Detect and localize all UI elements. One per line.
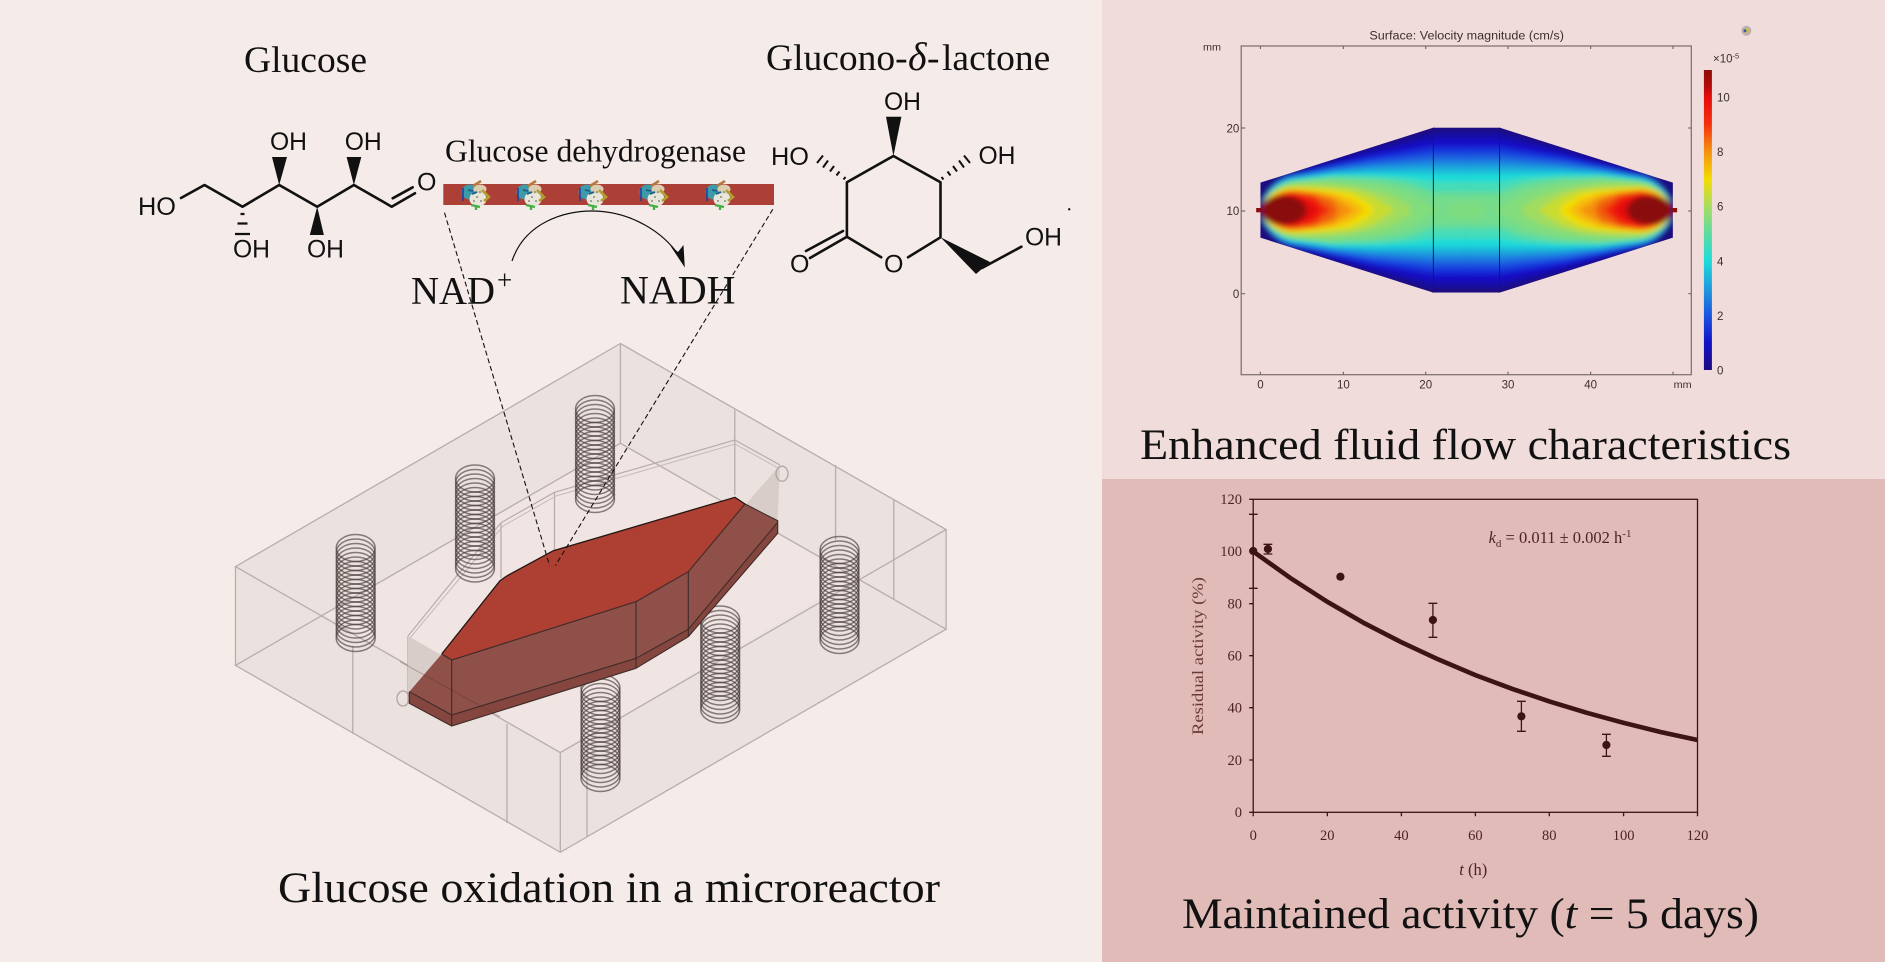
x axis tick labels: 120 bbox=[1687, 828, 1708, 844]
velocity field bbox=[1256, 128, 1678, 293]
fitted decay curve bbox=[1253, 551, 1698, 740]
heading: Glucono-delta-lactone: lactone bbox=[942, 38, 1050, 79]
annotation: deactivation constant: = 0.011 ± 0.002 h bbox=[1501, 528, 1623, 547]
axis labels: 10 bbox=[1227, 206, 1239, 218]
molecule: glucono-delta-lactone: O bbox=[884, 250, 903, 278]
x axis tick labels: 0 bbox=[1250, 828, 1257, 844]
chart: velocity magnitude surface plot bbox=[1203, 26, 1751, 391]
arrow: NAD+ to NADH bbox=[512, 211, 685, 268]
label: NAD+: NAD bbox=[411, 270, 495, 312]
flow channel outline bbox=[397, 440, 788, 706]
molecule: glucose: O bbox=[417, 169, 436, 197]
molecule: glucono-delta-lactone: OH bbox=[978, 142, 1016, 170]
annotation: deactivation constant: -1 bbox=[1622, 528, 1631, 540]
data points with error bars bbox=[1249, 514, 1611, 756]
caption: Maintained activity (t = 5 days): Maintained activity ( t = 5 days) bbox=[1182, 891, 1759, 938]
coil: left bbox=[336, 534, 375, 652]
heading: Glucono-delta-lactone: δ bbox=[908, 34, 928, 79]
heading: Glucono-delta-lactone: - bbox=[927, 38, 940, 79]
caption: Enhanced fluid flow characteristics: Enhanced fluid flow characteristics bbox=[1140, 422, 1791, 469]
molecule: glucose bbox=[138, 128, 436, 264]
x axis tick labels: 60 bbox=[1468, 828, 1483, 844]
molecule: glucose: HO bbox=[138, 193, 176, 221]
x axis tick labels: 40 bbox=[1394, 828, 1409, 844]
molecule: glucose: OH bbox=[307, 236, 344, 264]
axis labels: mm bbox=[1203, 43, 1221, 54]
panel: glucose oxidation in a microreactor bbox=[0, 0, 1102, 962]
x axis tick labels: 100 bbox=[1613, 828, 1634, 844]
label: Glucose dehydrogenase: Glucose dehydrogenase bbox=[445, 134, 746, 169]
colour bar legend: ×10 bbox=[1713, 53, 1733, 65]
reactor chamber bbox=[400, 497, 778, 726]
zoom guides: dashed lines bbox=[444, 209, 773, 566]
coil: front bbox=[581, 674, 620, 792]
molecule: glucono-delta-lactone: OH bbox=[1025, 224, 1062, 252]
colour bar legend: 2 bbox=[1717, 311, 1723, 323]
molecule: glucono-delta-lactone: O bbox=[790, 250, 809, 278]
molecule: glucono-delta-lactone: HO bbox=[771, 143, 809, 171]
axis labels: 0 bbox=[1233, 289, 1239, 301]
y axis tick labels: 120 bbox=[1220, 492, 1242, 508]
chart: residual activity vs time bbox=[1190, 492, 1708, 879]
coil: right bbox=[820, 536, 859, 654]
molecule: glucose: OH bbox=[345, 128, 382, 156]
colour bar legend: -5 bbox=[1733, 51, 1739, 60]
molecule: glucono-delta-lactone bbox=[771, 88, 1062, 278]
label: NAD+: + bbox=[497, 265, 512, 295]
annotation: deactivation constant: d bbox=[1496, 538, 1502, 550]
coil: back left bbox=[456, 465, 494, 582]
plot title: Surface: Velocity magnitude (cm/s) bbox=[1369, 30, 1564, 42]
small icon bbox=[1741, 26, 1751, 36]
molecule: glucose: OH bbox=[233, 236, 270, 264]
colour bar legend: 8 bbox=[1717, 147, 1723, 159]
colour bar legend: 0 bbox=[1717, 365, 1723, 377]
axis labels bbox=[1203, 43, 1692, 391]
colour bar legend bbox=[1704, 51, 1739, 377]
axis labels: 20 bbox=[1227, 123, 1239, 135]
transparent housing block bbox=[236, 344, 946, 852]
plot frame and ticks bbox=[1241, 46, 1691, 375]
y axis tick labels: 0 bbox=[1235, 805, 1242, 821]
axis labels: 30 bbox=[1502, 379, 1514, 391]
colour bar legend: 10 bbox=[1717, 92, 1730, 104]
y axis title: Residual activity (%) bbox=[1190, 577, 1207, 735]
molecule: glucono-delta-lactone: OH bbox=[884, 88, 921, 116]
heading: Glucono-delta-lactone: Glucono- bbox=[766, 38, 908, 79]
axis labels: 20 bbox=[1419, 379, 1432, 391]
axis labels: 0 bbox=[1257, 379, 1264, 391]
x axis tick labels: 20 bbox=[1320, 828, 1335, 844]
axis labels: 40 bbox=[1584, 379, 1597, 391]
panel: maintained activity bbox=[1102, 479, 1885, 962]
caption: Glucose oxidation in a microreactor: Glucose oxidation in a microreactor bbox=[278, 865, 940, 912]
x axis tick labels: 80 bbox=[1542, 828, 1557, 844]
y axis tick labels: 20 bbox=[1228, 753, 1242, 769]
x axis tick labels bbox=[1250, 828, 1708, 844]
coil: front right bbox=[701, 606, 740, 723]
y axis tick labels bbox=[1220, 492, 1242, 821]
axis labels: mm bbox=[1674, 380, 1692, 391]
axis labels: 10 bbox=[1337, 379, 1350, 391]
heading: Glucose: Glucose bbox=[244, 40, 367, 81]
y axis tick labels: 80 bbox=[1228, 596, 1242, 612]
y axis tick labels: 40 bbox=[1228, 700, 1242, 716]
colour bar legend: 6 bbox=[1717, 202, 1723, 214]
axes and ticks bbox=[1249, 499, 1698, 816]
y axis tick labels: 60 bbox=[1228, 648, 1242, 664]
microreactor 3D diagram bbox=[236, 344, 946, 852]
annotation: deactivation constant: k bbox=[1489, 528, 1497, 547]
y axis tick labels: 100 bbox=[1220, 544, 1242, 560]
stray period bbox=[1068, 208, 1070, 210]
coil: back centre bbox=[576, 396, 614, 512]
molecule: glucose: OH bbox=[270, 128, 307, 156]
colour bar legend: 4 bbox=[1717, 256, 1724, 268]
panel: enhanced fluid flow characteristics bbox=[1102, 0, 1885, 479]
label: NADH: NADH bbox=[620, 268, 736, 312]
x axis title: t (h) bbox=[1459, 860, 1487, 879]
enzyme bar with immobilised proteins bbox=[443, 181, 774, 210]
